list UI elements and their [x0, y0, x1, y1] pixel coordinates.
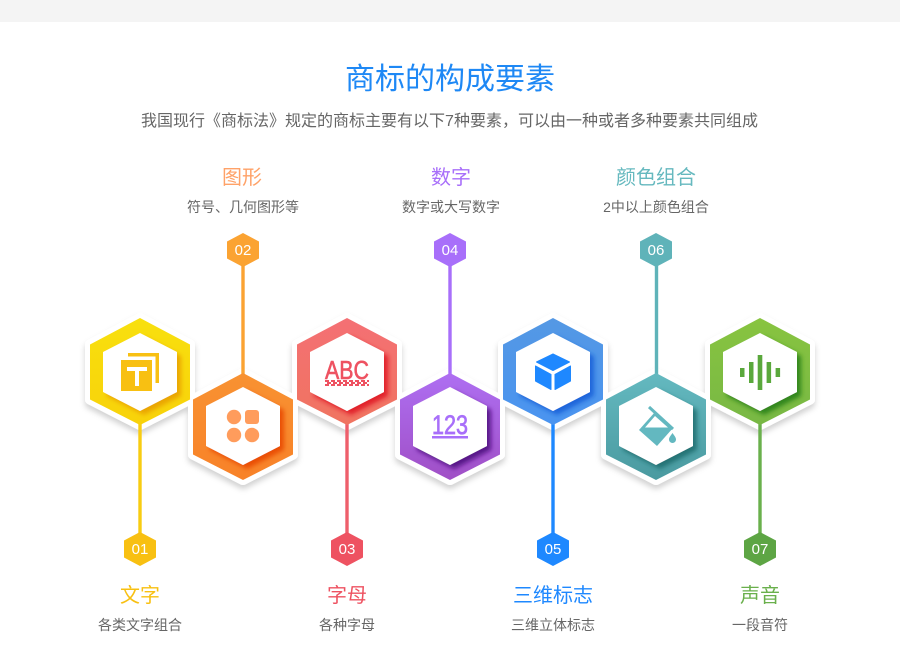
connector 03 [345, 420, 349, 535]
item 03: letters [297, 318, 397, 633]
connector 06 [655, 264, 658, 376]
hexagon 01 [90, 318, 190, 425]
badge 01: 01 [132, 541, 148, 558]
item 04: numbers [400, 166, 500, 480]
badge 05 [537, 532, 569, 566]
title: 商标的构成要素 [345, 63, 555, 96]
label 01: 文字 [120, 584, 160, 607]
top bar [0, 0, 900, 22]
icon: ABC: ABC [325, 355, 369, 385]
connector 01 [138, 420, 142, 535]
hexagon 02 [193, 373, 293, 480]
badge 07: 07 [752, 541, 768, 558]
badge 02: 02 [235, 242, 251, 259]
hexagon 05 [503, 318, 603, 425]
hexagon 04 [400, 373, 500, 480]
subtitle: 我国现行《商标法》规定的商标主要有以下7种要素，可以由一种或者多种要素共同组成 [141, 112, 758, 130]
icon: 123: 123 [432, 410, 468, 440]
icon: cube [536, 354, 570, 390]
badge 04: 04 [442, 242, 458, 259]
badge 05: 05 [545, 541, 561, 558]
icon: text T [121, 353, 159, 391]
item 02: graphic [187, 166, 299, 480]
description 01: 各类文字组合 [98, 617, 182, 633]
connector 04 [448, 264, 452, 376]
badge 06 [640, 233, 672, 267]
description 02: 符号、几何图形等 [187, 199, 299, 215]
badge 01 [124, 532, 156, 566]
badge 03: 03 [339, 541, 355, 558]
description 03: 各种字母 [319, 617, 375, 633]
badge 03 [331, 532, 363, 566]
item 05: 3D [503, 318, 603, 633]
description 06: 2中以上颜色组合 [603, 199, 709, 215]
label 04: 数字 [431, 166, 471, 189]
label 03: 字母 [327, 584, 367, 607]
hexagon 03 [297, 318, 397, 425]
badge 07 [744, 532, 776, 566]
label 07: 声音 [740, 584, 780, 607]
icon: shapes [227, 410, 259, 442]
item 06: colour combo [603, 166, 709, 480]
badge 02 [227, 233, 259, 267]
item 07: sound [710, 318, 810, 633]
description 05: 三维立体标志 [511, 617, 595, 633]
white halo behind hexagons [90, 318, 810, 480]
connector 02 [241, 264, 245, 376]
icon: paint bucket [639, 407, 676, 446]
description 04: 数字或大写数字 [402, 199, 500, 215]
label 05: 三维标志 [513, 584, 593, 607]
description 07: 一段音符 [732, 617, 788, 633]
badge 04 [434, 233, 466, 267]
hexagon 06 [606, 373, 706, 480]
connector 07 [758, 420, 762, 535]
connector 05 [551, 420, 555, 535]
label 06: 颜色组合 [616, 166, 696, 189]
badge 06: 06 [648, 242, 664, 259]
hexagon 07 [710, 318, 810, 425]
icon: sound wave [740, 355, 780, 390]
item 01: text [90, 318, 190, 633]
label 02: 图形 [222, 166, 262, 189]
